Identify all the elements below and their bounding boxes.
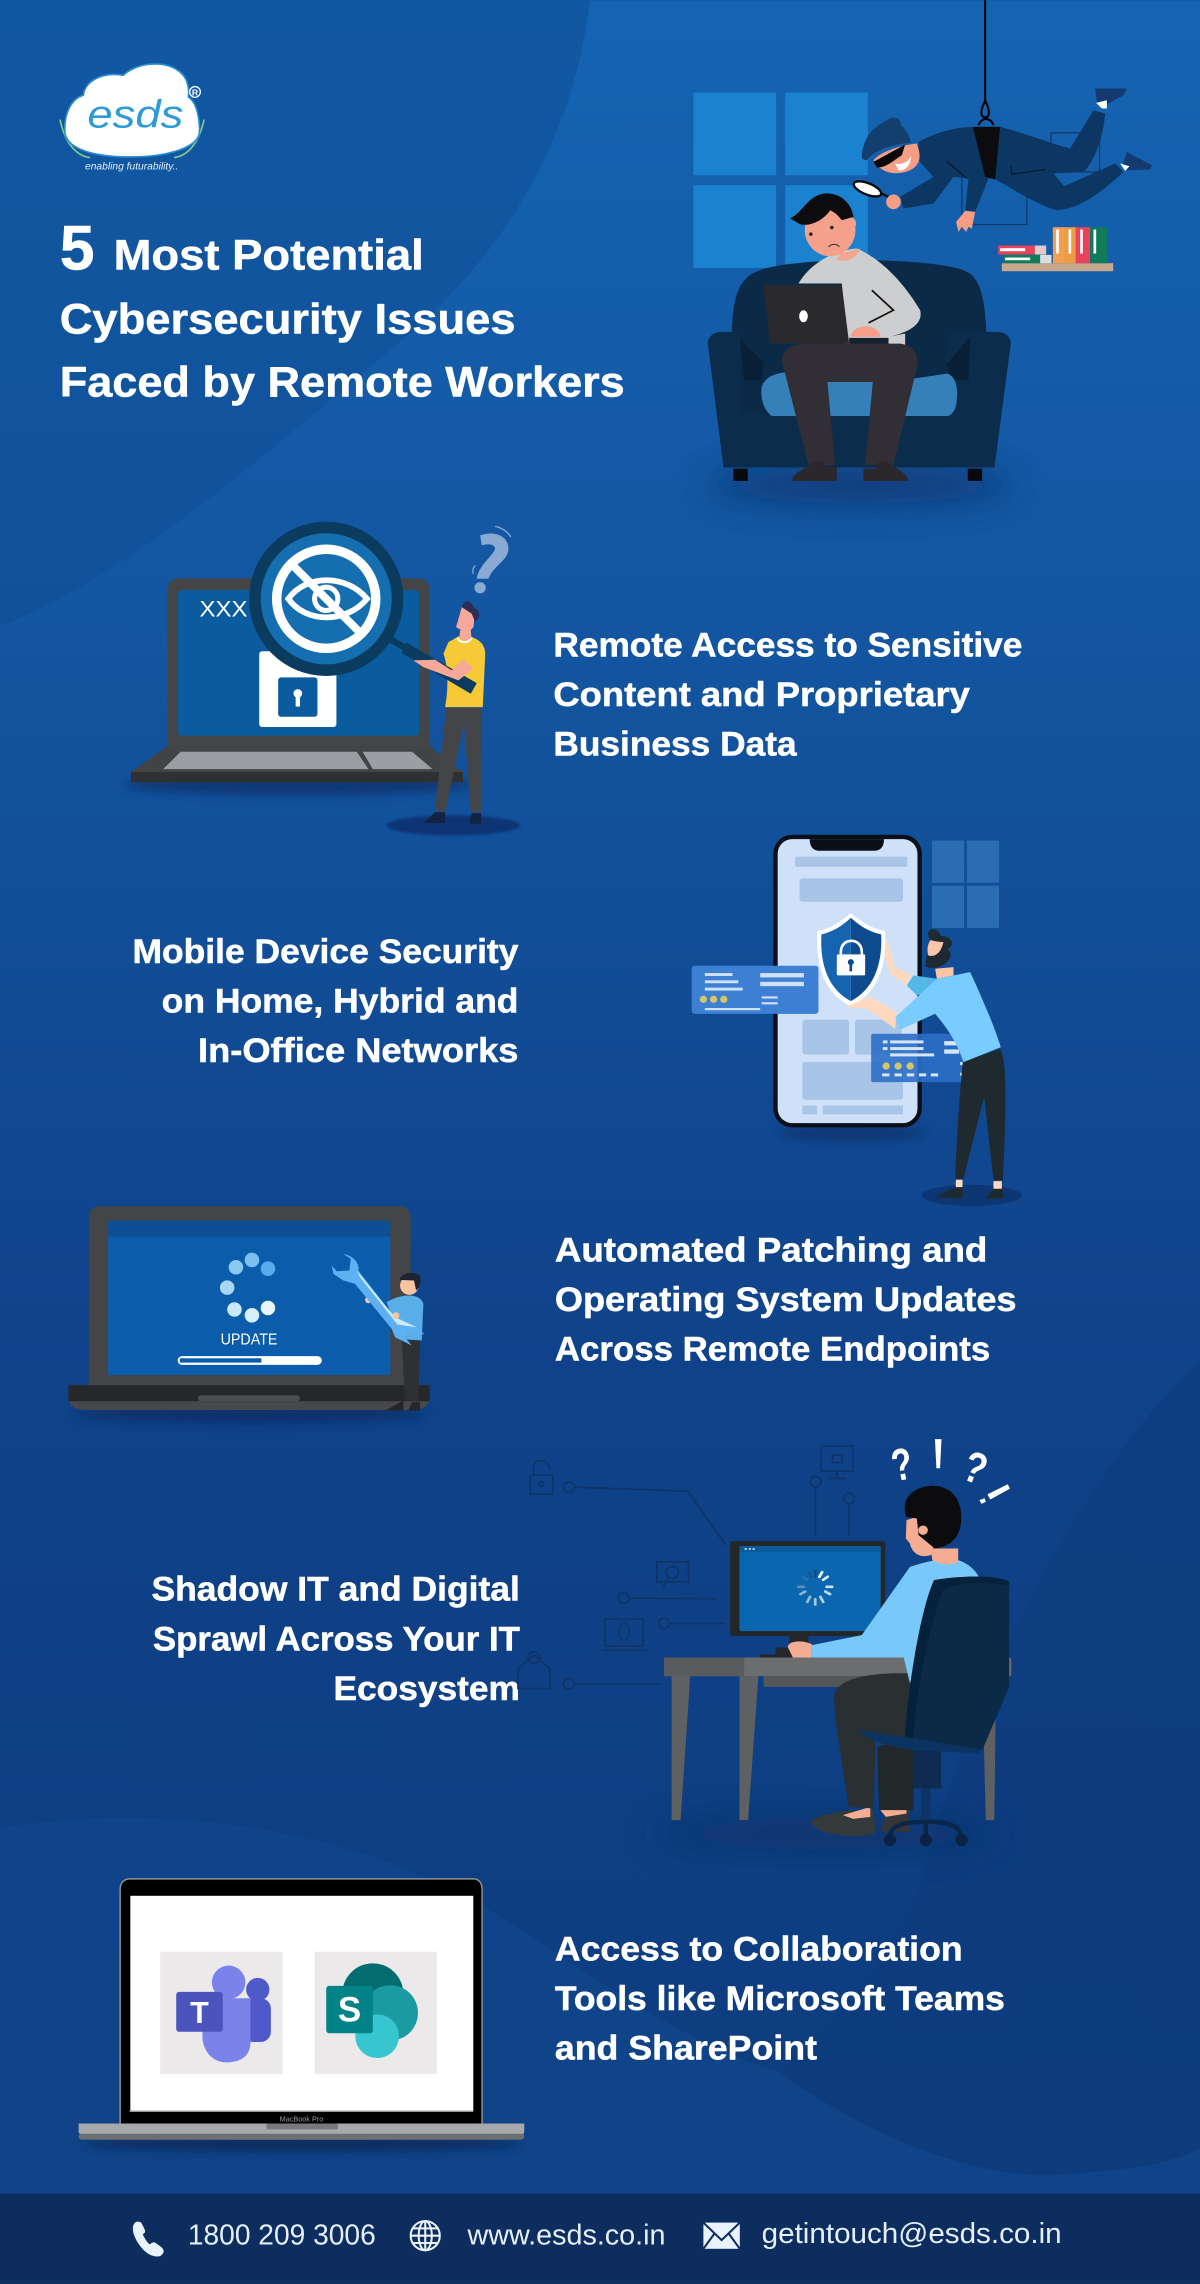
- item 5: MacBook with Teams and SharePoint: MacBook Pro: [280, 2114, 323, 2123]
- couch feet: [733, 469, 982, 481]
- magnifier: [249, 522, 408, 676]
- text: shadow IT: Ecosystem: [333, 1670, 520, 1708]
- SharePoint tile: [315, 1952, 437, 2074]
- logo: esds cloud: R: [192, 87, 199, 97]
- Teams tile: [160, 1952, 283, 2074]
- text: access to collaboration: and SharePoint: [555, 2029, 817, 2067]
- text: access to collaboration: [555, 1930, 1005, 2067]
- text: website: www.esds.co.in: [466, 2219, 666, 2251]
- picture frames: [962, 133, 1100, 225]
- shield: [817, 913, 885, 1006]
- logo: esds cloud: enabling futurability..: [85, 162, 178, 173]
- logo: esds cloud: esds: [87, 93, 183, 137]
- title: 5: [60, 214, 95, 284]
- cushion: [761, 372, 957, 416]
- item 2: phone and shield illustration: [692, 835, 1022, 1206]
- text: remote access: [553, 626, 1022, 763]
- text: remote access: Business Data: [553, 725, 798, 763]
- shadow: [922, 1185, 1022, 1206]
- thief: [982, 0, 988, 101]
- chair: [858, 1577, 1009, 1846]
- Teams tile: T: [190, 1996, 209, 2030]
- man shirt: [798, 249, 921, 345]
- title: [60, 214, 625, 405]
- text: automated patching: [555, 1231, 1017, 1368]
- item 4: person at desk illustration: [518, 1446, 1011, 1850]
- text: automated patching: Operating System Updates: [555, 1281, 1017, 1319]
- update label: UPDATE: [221, 1331, 277, 1348]
- progress bar: [178, 1356, 322, 1365]
- title: Cybersecurity Issues: [60, 296, 516, 343]
- loading dots: [220, 1253, 275, 1323]
- card: [871, 1034, 963, 1082]
- SharePoint tile: S: [338, 1991, 361, 2030]
- icon: globe: [411, 2221, 440, 2250]
- person and question mark: [387, 526, 520, 835]
- couch lower part and legs: [733, 344, 982, 481]
- confusion marks: ?: [957, 1441, 994, 1495]
- text: remote access: Content and Proprietary: [553, 676, 970, 714]
- text: mobile device security: In-Office Networks: [198, 1032, 518, 1070]
- faint network icons: [518, 1446, 855, 1689]
- person: [955, 1049, 1006, 1180]
- shield, card and person: [817, 913, 1022, 1206]
- text: mobile device security: Mobile Device Security: [133, 933, 518, 971]
- logo: esds cloud: [60, 64, 204, 173]
- text: phone: 1800 209 3006: [188, 2219, 376, 2251]
- window: [693, 93, 868, 268]
- confusion marks: ?: [887, 1437, 916, 1491]
- footer band: [0, 2193, 1200, 2284]
- monitor: [730, 1541, 885, 1658]
- item 5: MacBook with Teams and SharePoint: [79, 1879, 524, 2151]
- lock card: [259, 651, 336, 727]
- text: automated patching: Automated Patching and: [555, 1231, 987, 1269]
- person: [788, 1486, 979, 1836]
- text: mobile device security: on Home, Hybrid and: [162, 982, 518, 1020]
- shelf with books: [998, 227, 1113, 271]
- text: access to collaboration: Access to Collaboration: [555, 1930, 963, 1968]
- title: Faced by Remote Workers: [60, 358, 625, 405]
- XXX label: XXX: [200, 596, 248, 621]
- icon: phone: [133, 2222, 164, 2256]
- couch back: [732, 260, 987, 414]
- text: mobile device security: [133, 933, 518, 1070]
- man legs: [782, 344, 918, 465]
- info card left: [692, 966, 818, 1014]
- item 1: laptop with magnifier illustration: [124, 522, 520, 835]
- text: remote access: Remote Access to Sensitive: [553, 626, 1022, 664]
- text: email: getintouch@esds.co.in: [762, 2218, 1062, 2250]
- text: shadow IT: [151, 1571, 520, 1708]
- desk: [664, 1658, 1011, 1820]
- spinner: [798, 1571, 832, 1604]
- item 3: laptop update illustration: [68, 1206, 430, 1423]
- illustration: man on couch with window and thief: [693, 0, 1152, 504]
- text: access to collaboration: Tools like Microsoft Teams: [555, 1980, 1005, 2018]
- confusion marks: [887, 1437, 1010, 1504]
- person with wrench: [332, 1254, 424, 1411]
- couch body: [708, 332, 1011, 468]
- icon: envelope: [703, 2223, 740, 2249]
- text: automated patching: Across Remote Endpoints: [555, 1330, 990, 1368]
- title: Most Potential: [114, 232, 424, 279]
- text: shadow IT: Shadow IT and Digital: [151, 1571, 520, 1609]
- text: shadow IT: Sprawl Across Your IT: [153, 1620, 520, 1658]
